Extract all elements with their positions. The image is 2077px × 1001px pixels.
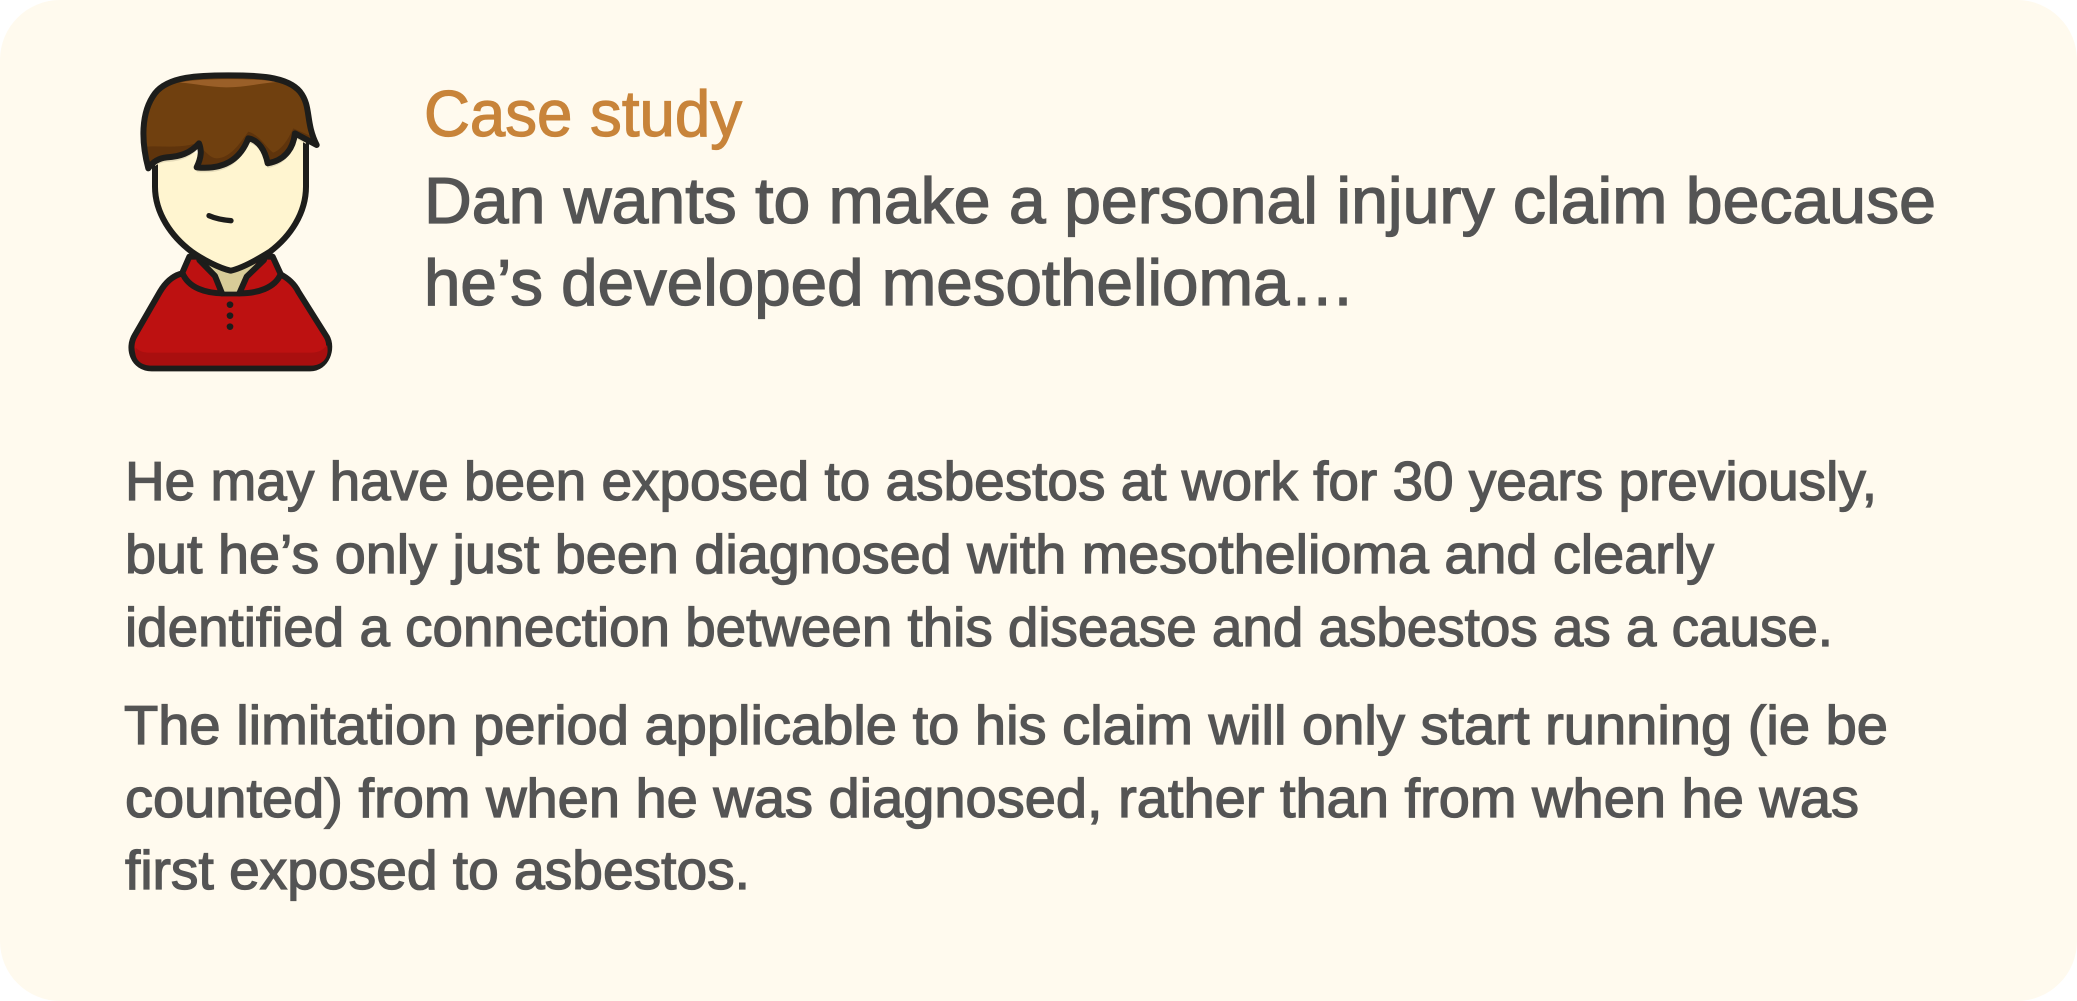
avatar hair main tone [146, 78, 310, 158]
text block: first paragraph [125, 450, 1877, 658]
icon: Dan avatar [131, 70, 329, 368]
label: Case study: Case study [424, 77, 742, 150]
avatar face [155, 133, 306, 271]
avatar collar [182, 257, 281, 293]
text block: first paragraph: identified a connection between this disease and asbestos as a cause. [125, 596, 1833, 658]
text block: second paragraph [124, 694, 1888, 901]
avatar hair [143, 75, 317, 168]
text block: second paragraph: The limitation period applicable to his claim will only start running (ie be [124, 694, 1888, 756]
avatar shirt [131, 274, 329, 368]
avatar hair highlight [180, 79, 277, 87]
heading: he’s developed mesothelioma… [424, 246, 1355, 319]
avatar hair outline [143, 75, 317, 168]
avatar neck [206, 263, 256, 292]
avatar hair shadow [155, 138, 306, 172]
avatar buttons [227, 301, 233, 330]
text block: second paragraph: first exposed to asbestos. [125, 839, 750, 901]
avatar collar edges [199, 260, 264, 293]
text block: first paragraph: but he’s only just been diagnosed with mesothelioma and clearly [125, 523, 1714, 585]
avatar shirt shading [135, 345, 328, 366]
text block: first paragraph: He may have been exposed to asbestos at work for 30 years previously, [125, 450, 1877, 512]
text block: second paragraph: counted) from when he was diagnosed, rather than from when he was [125, 767, 1859, 829]
avatar mouth [209, 216, 231, 221]
heading [424, 164, 1936, 319]
heading: Dan wants to make a personal injury claim because [424, 164, 1936, 237]
